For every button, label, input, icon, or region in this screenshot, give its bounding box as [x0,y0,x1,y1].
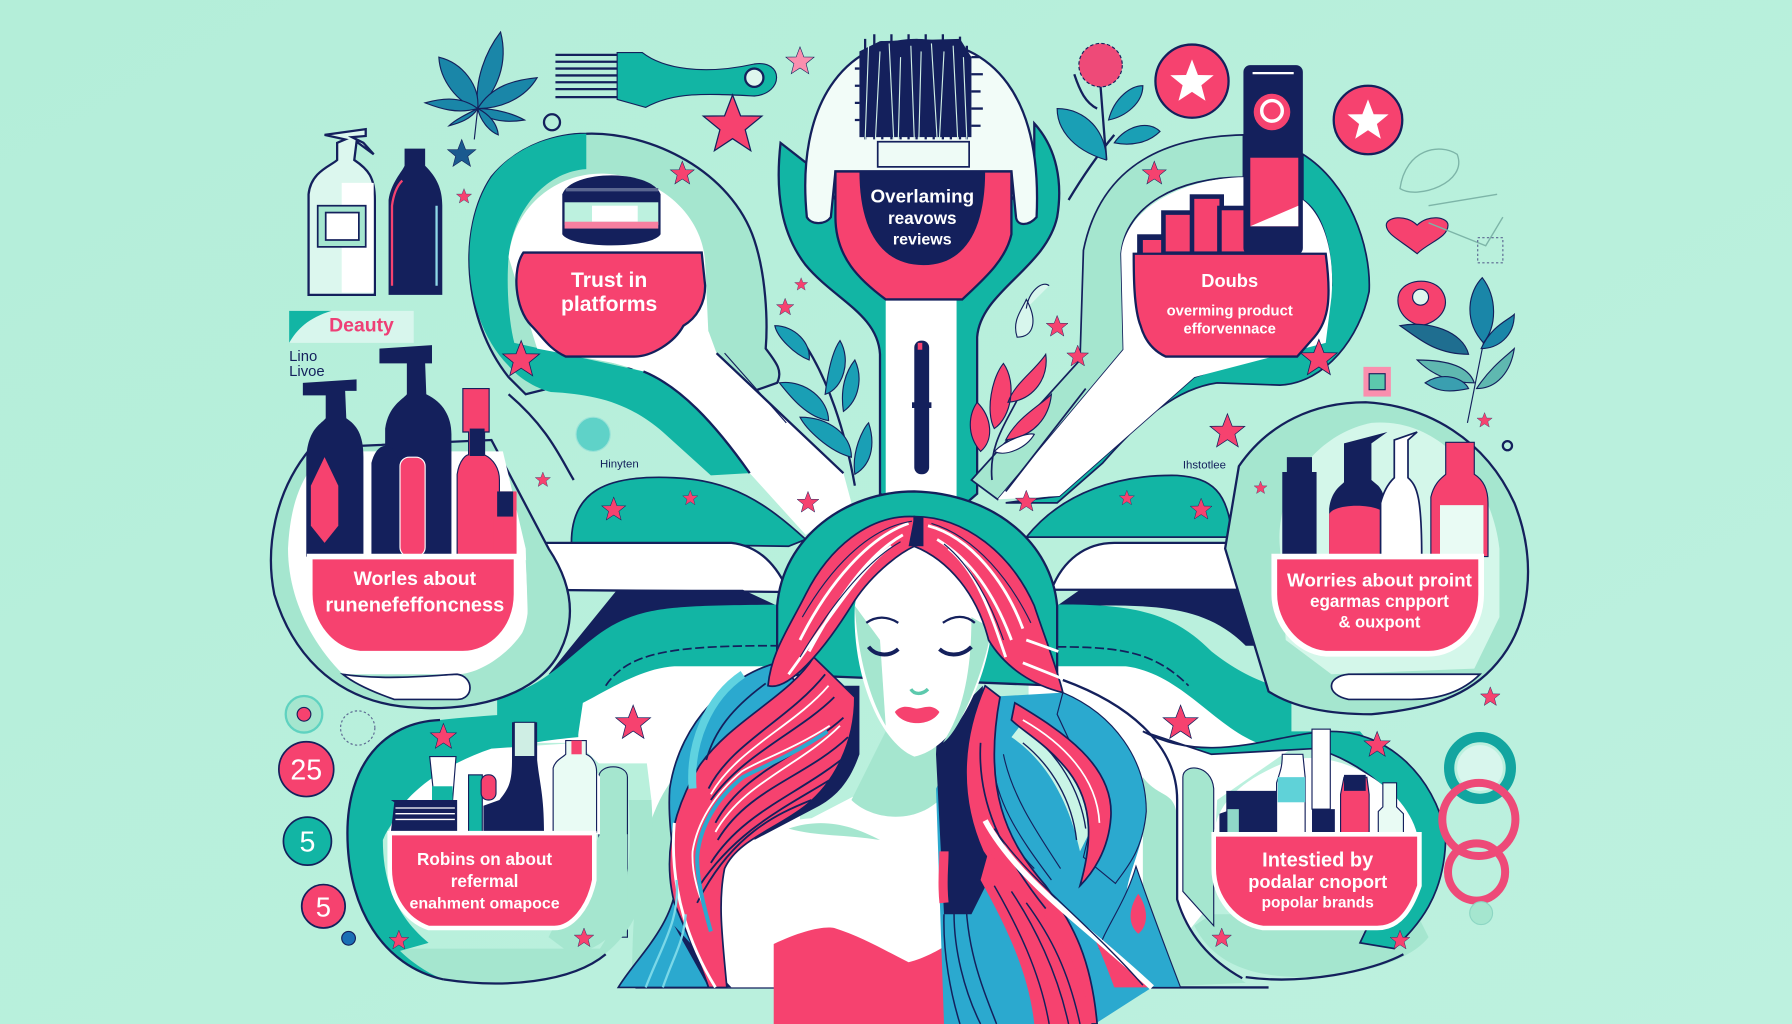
illustration: woman with long hair [618,491,1181,1024]
icon: product stack and tall device [1137,65,1303,255]
right hair mint stripes [1011,722,1091,851]
left hair pink [669,657,855,987]
top hair [768,516,914,686]
panel: worries right ring [1225,402,1528,714]
right hair centre strands [985,754,1061,880]
icon: palm leaf [425,32,537,139]
panel: trust in platforms ring [469,134,851,535]
text: worries right label: egarmas cnpport [1310,591,1449,611]
halo [777,491,1057,686]
right hair navy base [936,686,1006,914]
icon: right product bottles [1282,432,1488,557]
panel: overwhelming reviews shield [835,171,1011,299]
icon: teal badge [283,817,331,865]
face [855,546,992,757]
icon: pink badge [302,885,345,928]
icon: heart and decorative marks [1363,149,1503,397]
icon: number badges [279,742,334,797]
body [721,731,949,987]
lips [895,707,939,723]
text: shield label: reavows [888,208,957,228]
panel: doubts ring [971,65,1369,503]
panel: central bands left [497,477,806,734]
icon: centre-left leaf sprig [775,326,872,486]
nose [911,689,928,693]
dress [774,928,983,1024]
panel: top centre brush stem [779,40,1059,509]
text: retains label: enahment omapoce [409,896,560,913]
right hair solid blue base [936,693,1152,1024]
text: trust label: Trust in [571,269,647,292]
right hair pink strand [966,686,1097,1024]
icon: centre-right pink sprig [970,284,1051,480]
text: worries left label: runenefeffoncness [325,594,504,616]
text: line label: Livoe [289,364,325,380]
icon: hair brush [855,34,983,167]
text: worries right label: Worries about proint [1287,569,1472,590]
text: beauty: Deauty [329,314,394,336]
pill [343,674,470,699]
text: doubts label: overming product [1167,303,1293,319]
panel: trust bowl [516,253,705,357]
text: line label: Lino [289,349,317,365]
icon: top-left bottles [309,129,442,295]
text: shield label: Overlaming [870,185,974,206]
text: worries left label: Worles about [354,568,476,590]
icon: left bottom products [391,722,597,832]
panel: central bands right [1026,475,1417,800]
text: influenced label: podalar cnoport [1248,871,1387,892]
text: influenced label: popolar brands [1262,894,1374,911]
icon: right leaf sprig [1400,278,1514,423]
text: doubts label: efforvennace [1184,322,1276,338]
text: trust label: platforms [561,293,657,316]
icon: interlinked rings [1442,737,1515,925]
text: badge 25: 25 [290,754,322,786]
icon: accent stars [389,47,1500,949]
logo: beauty label [289,311,414,380]
icon: right bottom products [1219,729,1403,834]
panel: influenced ring [1143,729,1446,979]
text: doubts label: Doubs [1201,270,1258,291]
panel: worries left bowl [310,557,517,654]
right hair lower strands [944,891,997,1024]
panel: influenced bowl [1214,834,1419,928]
text: small captions: Ihstotlee [1183,460,1226,472]
icon: left product bottles [303,345,517,557]
panel: worries left ring [271,345,570,708]
left hair blue [618,663,800,987]
panel: white dome [805,40,1037,224]
text: small captions [600,458,1226,472]
pill [1331,674,1480,699]
text: retains label: Robins on about [417,849,552,869]
panel: retains ring [347,706,652,983]
panel: white central field [503,663,1291,987]
icon: cream jar [562,175,661,245]
eyes [869,647,971,654]
text: influenced label: Intestied by [1262,849,1373,871]
panel: worries right bowl [1274,557,1481,654]
right hair outer blue [1057,693,1146,883]
panel: retains bowl [390,833,594,928]
text: shield label: reviews [893,232,952,249]
left hair navy under layer [754,686,859,840]
text: small captions: Hinyten [600,458,639,470]
icon: pen [912,341,931,474]
panel: doubts bowl [1134,254,1329,357]
text: worries right label: & ouxpont [1338,612,1421,631]
icon: comb [555,53,777,107]
text: badge small 5: 5 [316,892,331,923]
icon: small decorative dots [286,114,1512,945]
text: badge 5: 5 [299,826,315,858]
icon: flower [1057,43,1160,160]
right hair pink lock [1011,703,1111,886]
icon: star badges [1155,45,1402,154]
text: retains label: refermal [451,871,518,891]
